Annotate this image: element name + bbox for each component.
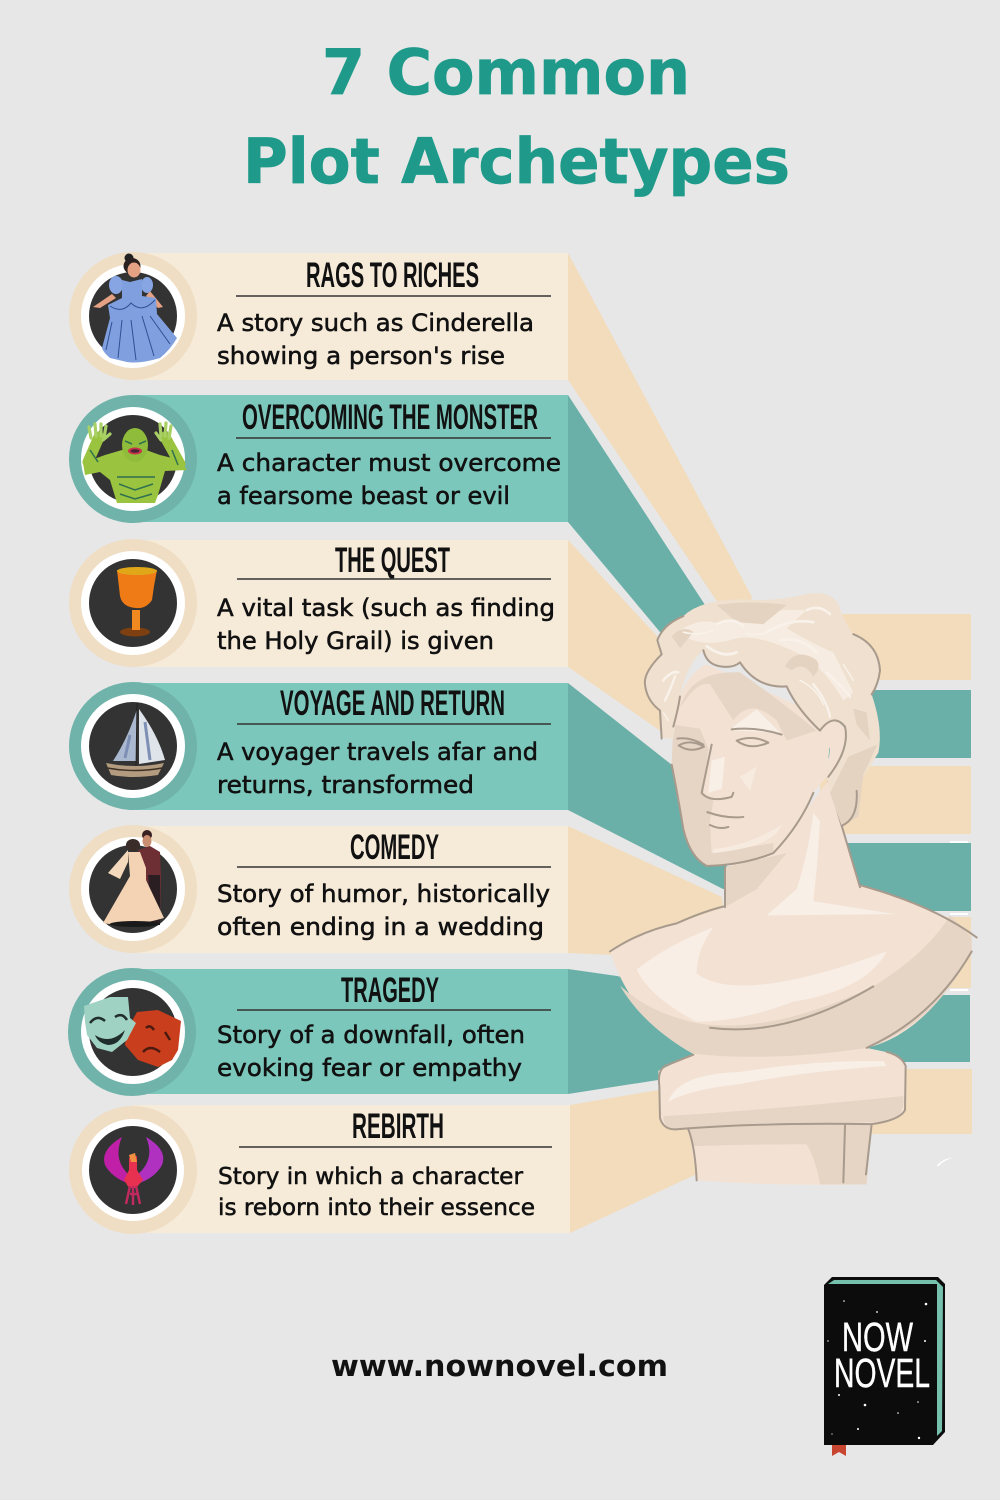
right stripes behind statue (780, 614, 972, 1134)
neck (725, 781, 895, 915)
description: A character must overcome (217, 449, 561, 477)
logo wordmark: NOW (842, 1314, 913, 1360)
heading: THE QUEST (335, 541, 450, 580)
description: A voyager travels afar and (217, 738, 538, 766)
logo wordmark (834, 1314, 930, 1396)
icon: holy grail goblet (69, 539, 197, 667)
description: A vital task (such as finding (217, 594, 555, 622)
icon: sailing boat (69, 682, 197, 810)
stars (827, 1300, 927, 1439)
description: is reborn into their essence (218, 1195, 535, 1221)
bookmark (832, 1445, 846, 1456)
heading: COMEDY (350, 828, 439, 867)
description (217, 309, 534, 370)
description: the Holy Grail) is given (217, 627, 494, 655)
heading: REBIRTH (352, 1107, 444, 1146)
face (672, 664, 830, 866)
panel: voyage and return (69, 682, 568, 810)
description: Story in which a character (218, 1164, 524, 1190)
description (217, 449, 561, 510)
description: A story such as Cinderella (217, 309, 534, 337)
panel: rags to riches (69, 252, 568, 380)
pedestal (688, 1122, 872, 1185)
description: a fearsome beast or evil (217, 482, 510, 510)
description (217, 738, 538, 799)
heading: VOYAGE AND RETURN (280, 684, 505, 723)
icon: wedding couple (69, 825, 197, 953)
description (217, 594, 555, 655)
shoulders and chest (610, 885, 977, 1057)
heading: TRAGEDY (341, 971, 439, 1010)
description: showing a person's rise (217, 342, 505, 370)
title (243, 36, 790, 198)
heading: RAGS TO RICHES (306, 256, 479, 295)
panel: comedy (69, 825, 568, 953)
title: Plot Archetypes (243, 125, 790, 198)
title: 7 Common (322, 36, 690, 109)
logo: Now Novel book (824, 1277, 945, 1456)
heading: OVERCOMING THE MONSTER (242, 398, 538, 437)
plinth (658, 1048, 906, 1129)
statue bust (610, 593, 977, 1185)
website url: www.nownovel.com (331, 1349, 668, 1383)
panel: rebirth (69, 1105, 570, 1234)
icon: comedy and tragedy masks (68, 968, 196, 1096)
description: evoking fear or empathy (217, 1054, 522, 1082)
icon: princess in blue gown (69, 252, 197, 380)
curly hair (645, 593, 880, 826)
icon: phoenix (69, 1106, 197, 1234)
description: returns, transformed (217, 771, 474, 799)
description (217, 880, 550, 941)
description: Story of a downfall, often (217, 1021, 525, 1049)
panel: the quest (69, 539, 568, 667)
description (217, 1021, 525, 1082)
panel: tragedy (68, 968, 568, 1096)
logo wordmark: NOVEL (834, 1350, 930, 1396)
icon: green swamp monster (69, 395, 197, 523)
ribbons connecting panels to statue (568, 253, 752, 1233)
description: often ending in a wedding (217, 913, 544, 941)
description: Story of humor, historically (217, 880, 550, 908)
panel: overcoming the monster (69, 395, 568, 523)
description (218, 1164, 535, 1221)
